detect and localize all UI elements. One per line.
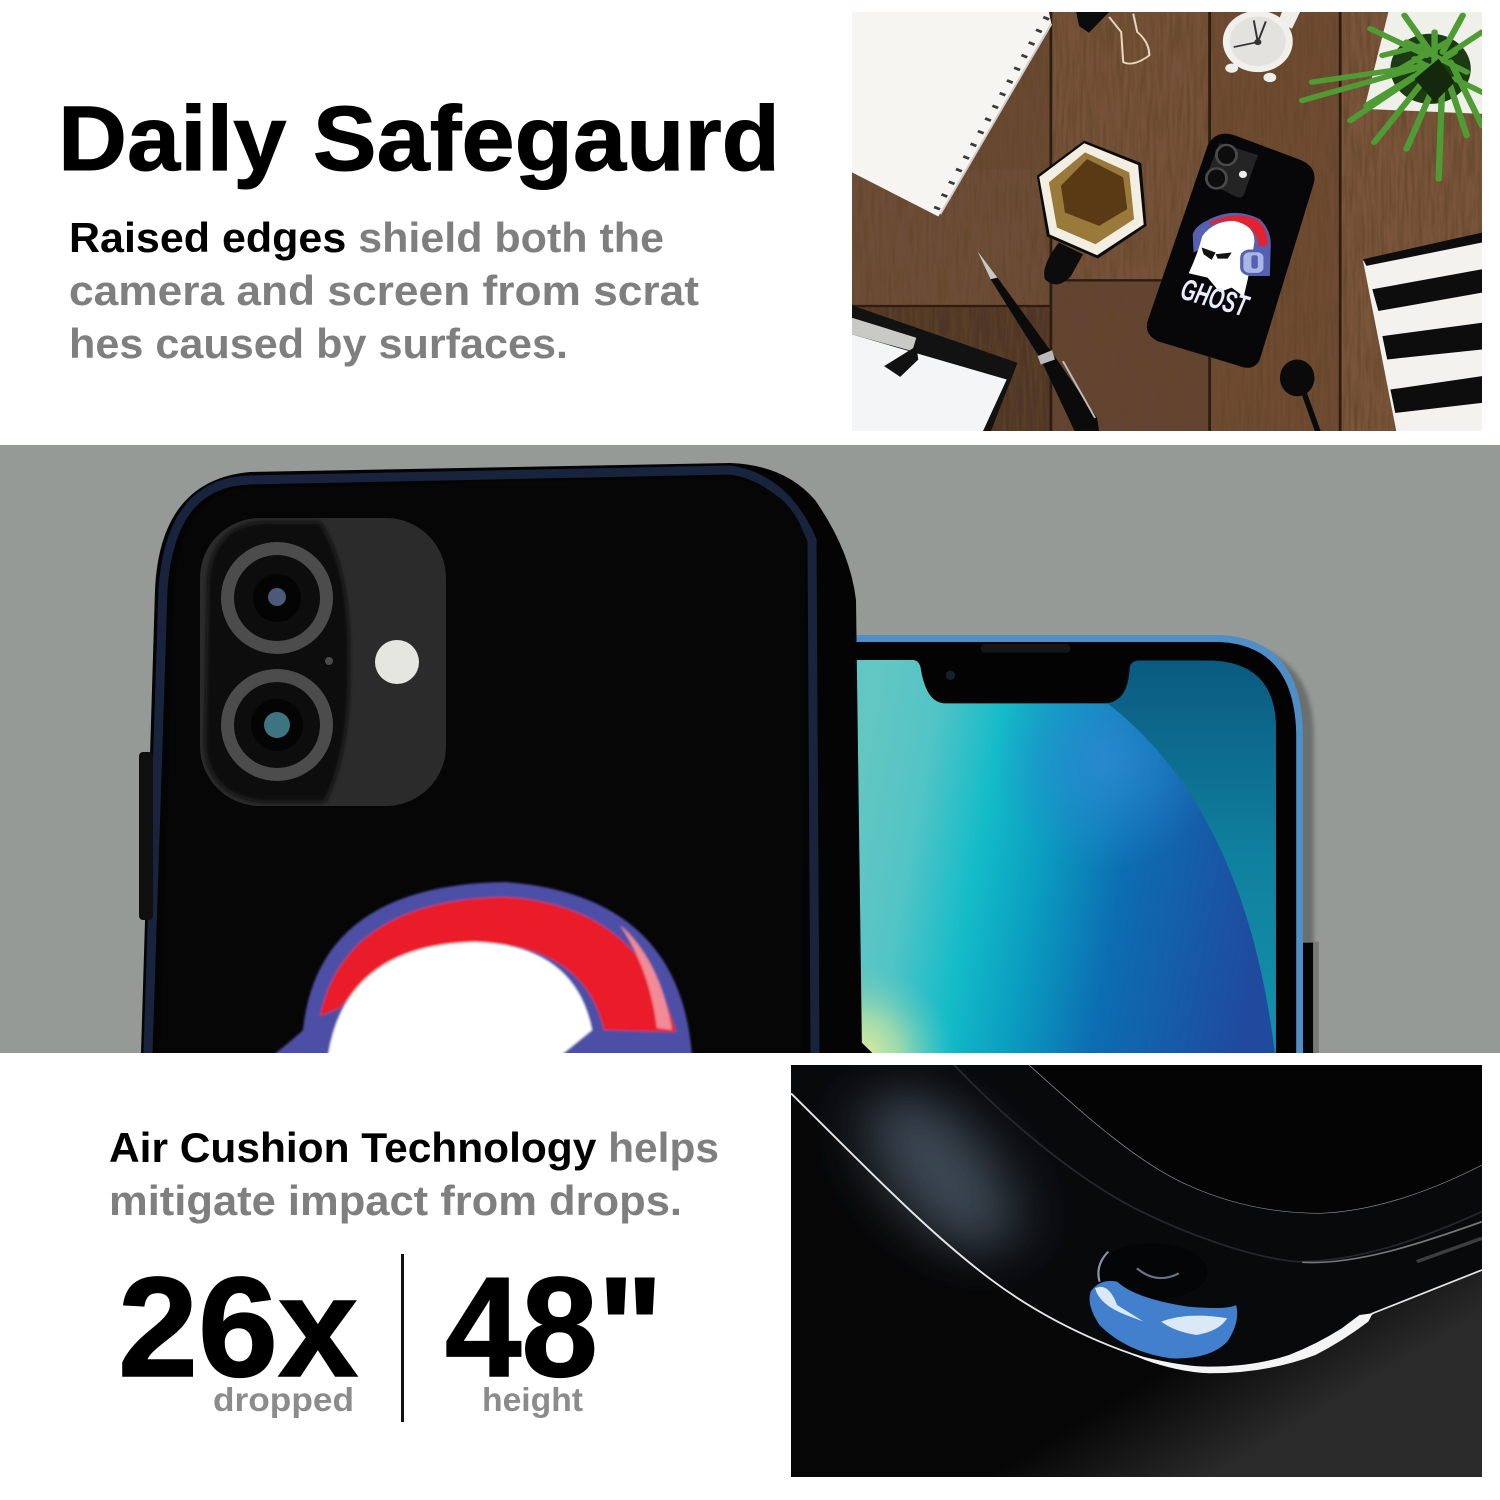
- photo: phone on wooden desk: [852, 11, 1482, 432]
- notebook: [852, 12, 1052, 216]
- stat: 48 inch height: height: [482, 1381, 583, 1418]
- text block: raised edges: [69, 214, 699, 367]
- bumper band: [814, 1065, 1482, 1288]
- floor: [791, 1271, 1482, 1477]
- earphone: [1280, 359, 1318, 432]
- ghost wordmark: GHOST: [1177, 273, 1253, 324]
- front phone with screen: [856, 635, 1319, 1060]
- coffee cup: [1037, 141, 1147, 284]
- wood planks: [852, 12, 1482, 432]
- back case phone: [139, 463, 862, 1056]
- text block: raised edges: camera and screen from scrat: [69, 267, 699, 314]
- potted plant: [1302, 12, 1482, 179]
- small phone: [1147, 134, 1315, 368]
- text block: raised edges: Raised edges shield both the: [69, 214, 664, 261]
- camera island: [200, 518, 446, 806]
- air cushion bubble: [1090, 1243, 1237, 1358]
- ghost mascot: [1189, 213, 1271, 297]
- white bumper edge: [791, 1093, 1482, 1373]
- title: Daily Safegaurd: [58, 88, 780, 190]
- striped notebook: [1363, 233, 1482, 432]
- divider: [401, 1254, 404, 1422]
- alarm clock: [1223, 11, 1300, 82]
- pen: [977, 251, 1099, 432]
- stat: 26x dropped: 26x: [118, 1248, 358, 1407]
- text block: air cushion: [109, 1124, 719, 1224]
- wallpaper: [856, 660, 1276, 1053]
- stat: 26x dropped: dropped: [213, 1381, 354, 1418]
- photo: air cushion corner closeup: [791, 1065, 1482, 1477]
- clipboard: [852, 305, 1018, 432]
- headphone ghost graphic: [272, 882, 692, 1056]
- binder clip: [1076, 12, 1149, 64]
- stat: 48 inch height: 48": [445, 1248, 663, 1407]
- text block: raised edges: hes caused by surfaces.: [69, 320, 568, 367]
- panel: gray band with phones: [0, 445, 1500, 1060]
- text block: air cushion: mitigate impact from drops.: [109, 1177, 682, 1224]
- text block: air cushion: Air Cushion Technology helps: [109, 1124, 719, 1171]
